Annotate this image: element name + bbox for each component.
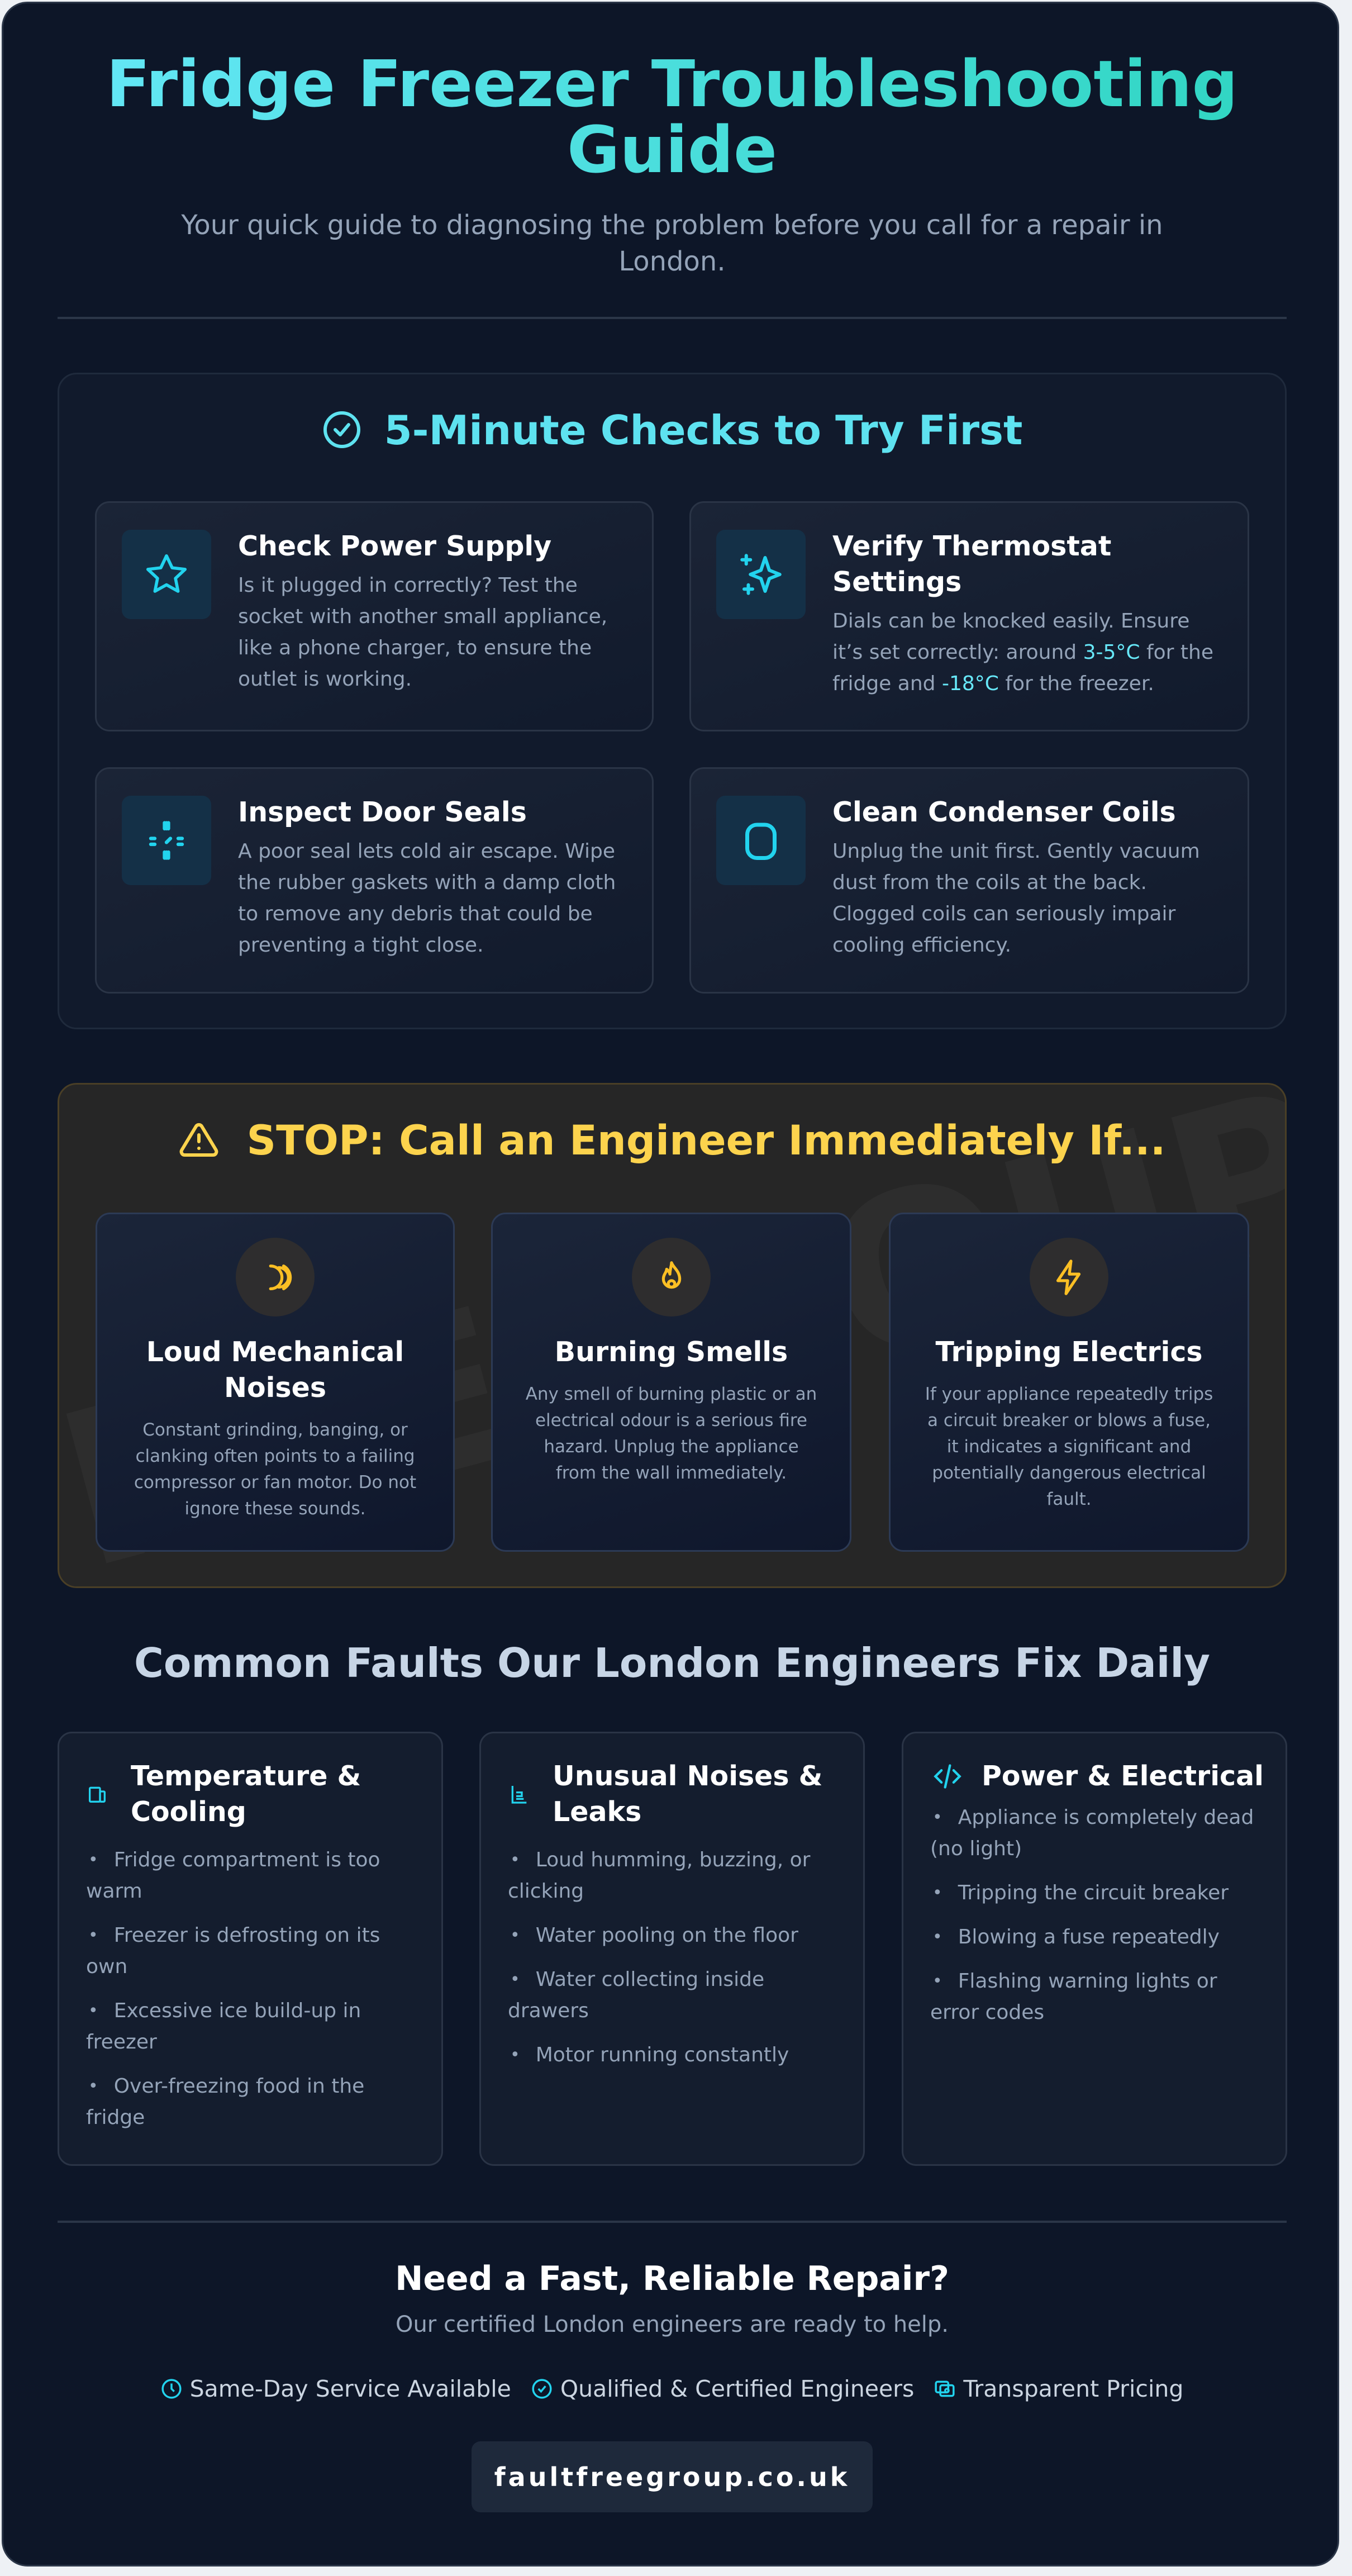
fault card: power [902, 1732, 1287, 2166]
warning card: burning [491, 1213, 851, 1552]
subtitle: Your quick guide to diagnosing the problem before you call for a repair in London. [181, 210, 1163, 277]
fault card: temperature [58, 1732, 443, 2166]
list: temperature: Excessive ice build-up in freezer [86, 1999, 361, 2054]
icon: noise [236, 1238, 315, 1316]
title [3, 51, 1341, 183]
text: thermostat: Dials can be knocked easily. Ensure [832, 610, 1189, 633]
warning card: noises: Loud Mechanical Noises [146, 1336, 404, 1404]
text: power: Is it plugged in correctly? Test the socket with another small appliance, like a phone charger, to ensure the outlet is working. [238, 574, 607, 691]
list: temperature: Freezer is defrosting on its own [86, 1924, 380, 1978]
text: power: Check Power Supply [238, 530, 551, 562]
list: temperature: Over-freezing food in the fridge [86, 2075, 364, 2129]
text: seals: A poor seal lets cold air escape. Wipe the rubber gaskets with a damp cloth to remove any debris that could be preventing a tight close. [238, 840, 616, 957]
list: power: Blowing a fuse repeatedly [958, 1926, 1220, 1948]
warning card: electrics: If your appliance repeatedly trips a circuit breaker or blows a fuse, it indicates a significant and potentially dangerous electrical fault. [925, 1384, 1213, 1509]
icon: lightning [1030, 1238, 1108, 1316]
header: power: Power & Electrical [982, 1760, 1264, 1792]
warning card: electrics [889, 1213, 1249, 1552]
feature: certified: Qualified & Certified Engineers [560, 2375, 914, 2402]
list: noises: Motor running constantly [536, 2043, 789, 2066]
list: temperature: Fridge compartment is too warm [86, 1848, 380, 1903]
heading: checks: 5-Minute Checks to Try First [384, 407, 1022, 454]
fault card: noises [479, 1732, 865, 2166]
check card: coils [689, 767, 1249, 994]
features row [161, 2375, 1183, 2402]
list: power [930, 1806, 1254, 2024]
text: coils: Unplug the unit first. Gently vacuum dust from the coils at the back. Clogged coils can seriously impair cooling efficiency. [832, 840, 1200, 957]
header: noises: Unusual Noises & Leaks [553, 1760, 822, 1828]
list: noises: Water collecting inside drawers [508, 1968, 764, 2022]
icon: star [122, 530, 211, 619]
list: noises [508, 1848, 810, 2066]
list: power: Appliance is completely dead (no light) [930, 1806, 1254, 1860]
list: noises: Loud humming, buzzing, or clicking [508, 1848, 810, 1903]
warning card: noises [96, 1213, 455, 1552]
website button [472, 2441, 873, 2512]
title: Fridge Freezer Troubleshooting [106, 47, 1238, 122]
website button: faultfreegroup.co.uk [494, 2462, 850, 2492]
heading: stop: STOP: Call an Engineer Immediately If... [247, 1117, 1165, 1165]
warning card: noises: Constant grinding, banging, or clanking often points to a failing compressor or fan motor. Do not ignore these sounds. [134, 1420, 416, 1519]
check card: power [95, 501, 654, 731]
list: power: Flashing warning lights or error codes [930, 1970, 1217, 2024]
icon: sparkle [716, 530, 806, 619]
check card: door seals [95, 767, 654, 994]
heading: common faults: Common Faults Our London Engineers Fix Daily [134, 1639, 1210, 1686]
icon: warning triangle [180, 1123, 218, 1157]
warning card: burning: Any smell of burning plastic or an electrical odour is a serious fire hazard. Unplug the appliance from the wall immediately. [526, 1384, 817, 1483]
text: seals: Inspect Door Seals [238, 796, 527, 828]
warning card: electrics: Tripping Electrics [935, 1336, 1203, 1368]
icon: rounded shape [716, 796, 806, 885]
header: temperature: Temperature & Cooling [131, 1760, 361, 1828]
text: thermostat: Verify Thermostat Settings [832, 530, 1111, 598]
panel: 5-minute checks [58, 373, 1287, 1029]
list: temperature [86, 1848, 380, 2129]
check card: thermostat [689, 501, 1249, 731]
list: power: Tripping the circuit breaker [958, 1881, 1229, 1904]
warning card: burning: Burning Smells [555, 1336, 788, 1368]
text: thermostat [832, 530, 1213, 695]
title: Guide [567, 113, 777, 188]
text: thermostat: fridge and -18°C for the freezer. [832, 672, 1154, 695]
list: noises: Water pooling on the floor [536, 1924, 798, 1947]
icon: flame [632, 1238, 711, 1316]
feature: same-day: Same-Day Service Available [190, 2375, 511, 2402]
cta subtext: Our certified London engineers are ready to help. [396, 2312, 949, 2337]
text: coils: Clean Condenser Coils [832, 796, 1176, 828]
text: thermostat: it’s set correctly: around 3-5°C for the [832, 641, 1213, 664]
feature: pricing: Transparent Pricing [963, 2375, 1183, 2402]
icon: dashed seal [122, 796, 211, 885]
cta heading: Need a Fast, Reliable Repair? [395, 2259, 949, 2298]
icon: check circle [323, 411, 360, 448]
